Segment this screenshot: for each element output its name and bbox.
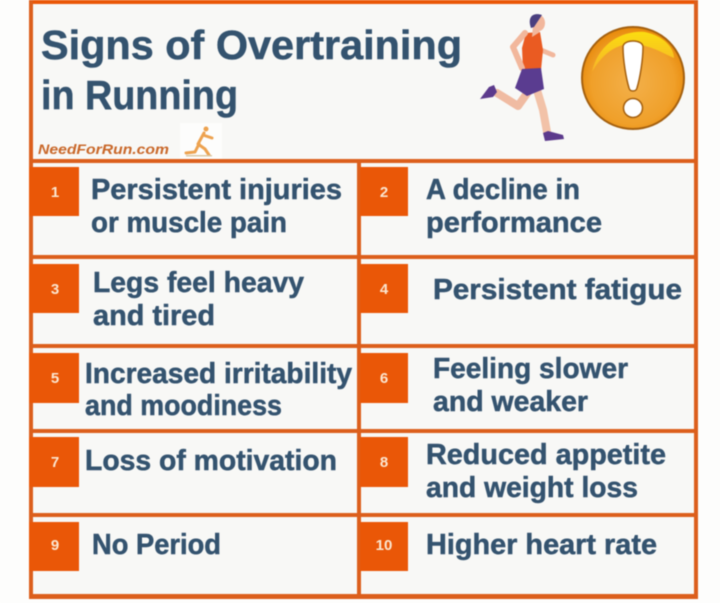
item 8: Reduced appetite — [426, 439, 666, 471]
item 2: performance — [426, 207, 602, 239]
item 6: and weaker — [433, 386, 588, 418]
item 9: 9 — [51, 537, 59, 554]
item 10 — [360, 522, 657, 571]
item 7: 7 — [51, 454, 59, 471]
item 7: Loss of motivation — [85, 445, 337, 477]
item 8: 8 — [380, 454, 388, 471]
item 5 — [29, 353, 352, 422]
item 1: or muscle pain — [91, 207, 287, 239]
item 7 — [29, 437, 337, 487]
item 5: Increased irritability — [85, 358, 352, 390]
item 9: No Period — [92, 529, 221, 561]
item 3: 3 — [51, 281, 59, 298]
item 10: 10 — [376, 537, 392, 554]
item 9 — [29, 522, 221, 571]
item 4: Persistent fatigue — [433, 274, 682, 306]
item 1: Persistent injuries — [91, 174, 342, 206]
item 3: and tired — [93, 300, 215, 332]
item 6: Feeling slower — [433, 353, 628, 385]
item 2 — [360, 167, 602, 239]
item 2: 2 — [380, 184, 388, 201]
title: Signs of Overtraining — [41, 22, 462, 68]
title — [41, 22, 462, 118]
item 6 — [360, 353, 628, 418]
item 8: and weight loss — [426, 472, 638, 504]
item 1 — [29, 167, 342, 239]
item 2: A decline in — [426, 174, 580, 206]
item 1: 1 — [51, 184, 59, 201]
item 8 — [360, 437, 666, 504]
item 5: and moodiness — [85, 390, 282, 422]
item 4: 4 — [380, 281, 389, 298]
item 3 — [29, 264, 304, 332]
icon: orange warning circle with exclamation mark — [581, 26, 685, 130]
item 5: 5 — [51, 370, 59, 387]
item 3: Legs feel heavy — [93, 267, 304, 299]
title: in Running — [41, 72, 238, 118]
icon: small orange runner logo — [180, 123, 222, 159]
item 10: Higher heart rate — [426, 529, 657, 561]
item 6: 6 — [380, 370, 388, 387]
brand text: NeedForRun.com — [38, 141, 169, 157]
icon: runner illustration — [480, 14, 564, 141]
item 4 — [360, 264, 682, 313]
